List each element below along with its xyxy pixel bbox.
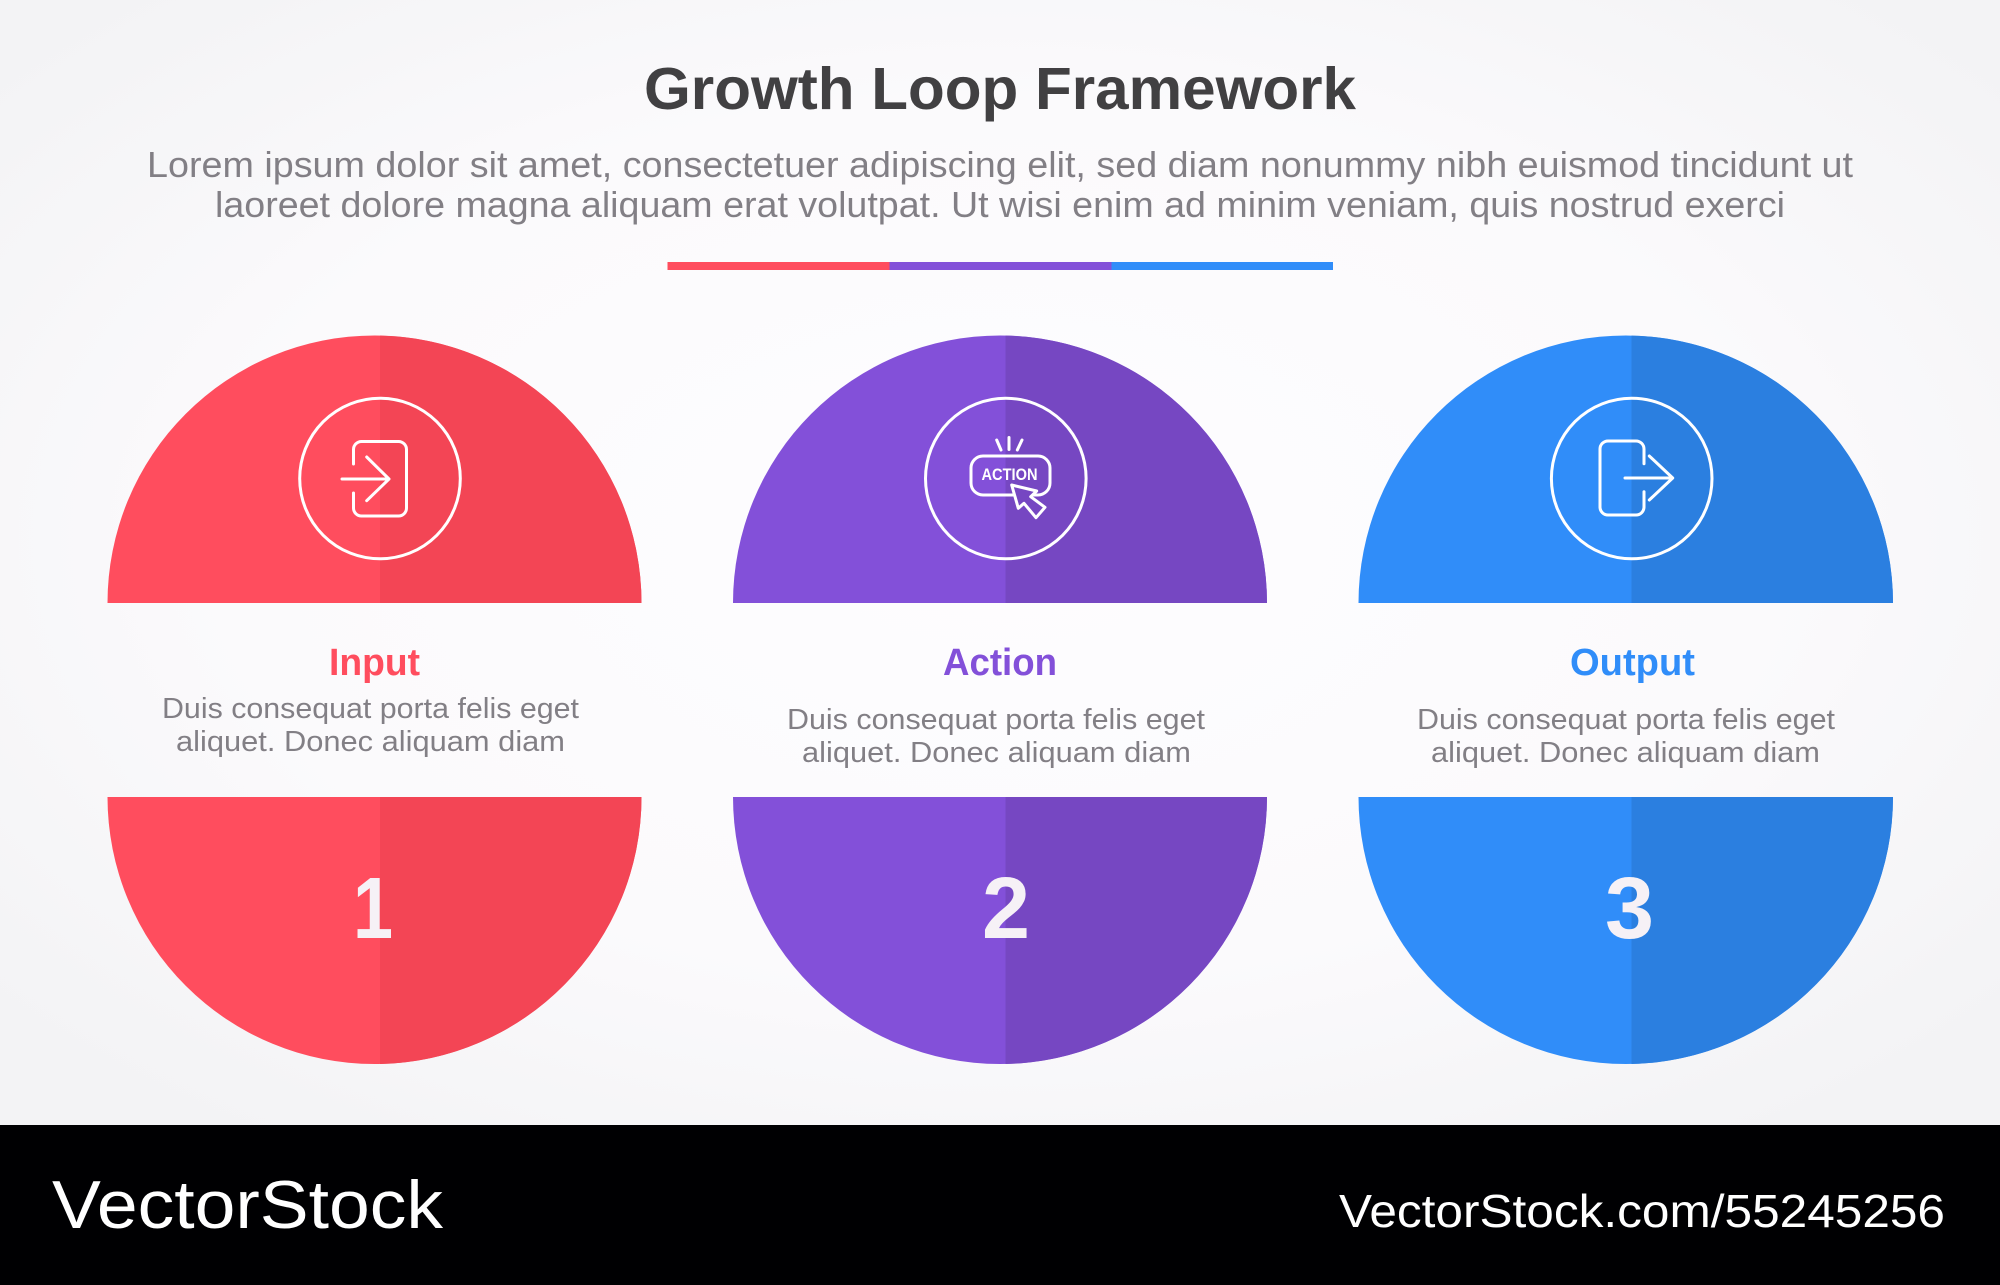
footer bar (0, 1125, 2000, 1285)
number 3: 3 (1605, 860, 1654, 957)
panel: action (733, 336, 1267, 1064)
action top semicircle (733, 336, 1267, 603)
input description: Duis consequat porta felis eget (162, 693, 579, 725)
output bottom semicircle (1358, 797, 1893, 1064)
output top semicircle (1358, 336, 1893, 603)
tricolor divider (668, 262, 1333, 270)
icon: action button with cursor in ring (926, 398, 1086, 559)
input bottom semicircle (108, 797, 642, 1064)
input label: Input (329, 642, 420, 684)
input top semicircle (108, 336, 642, 603)
subtitle text (147, 144, 1853, 225)
number 2: 2 (982, 860, 1030, 957)
action description (787, 704, 1205, 769)
action description: Duis consequat porta felis eget (787, 704, 1205, 736)
icon: exit door in ring (1551, 398, 1712, 559)
panel: input (108, 336, 642, 1064)
icon: enter door in ring (300, 398, 460, 559)
number 1: 1 (353, 860, 393, 957)
title: Growth Loop Framework (644, 56, 1356, 122)
footer url: VectorStock.com/55245256 (1339, 1185, 1945, 1237)
subtitle text: Lorem ipsum dolor sit amet, consectetuer adipiscing elit, sed diam nonummy nibh euismod tincidunt ut (147, 144, 1853, 185)
action bottom semicircle (733, 797, 1267, 1064)
panel: output (1358, 336, 1893, 1064)
output description: Duis consequat porta felis eget (1417, 704, 1835, 736)
input description: aliquet. Donec aliquam diam (176, 726, 565, 758)
output label: Output (1570, 642, 1695, 684)
output description (1417, 704, 1835, 769)
output description: aliquet. Donec aliquam diam (1431, 737, 1820, 769)
icon: action button with cursor in ring: ACTION (982, 465, 1038, 484)
input description (162, 693, 579, 758)
action description: aliquet. Donec aliquam diam (802, 737, 1191, 769)
footer logo text: VectorStock (52, 1167, 444, 1243)
subtitle text: laoreet dolore magna aliquam erat volutpat. Ut wisi enim ad minim veniam, quis nostrud exerci (215, 184, 1785, 225)
action label: Action (943, 642, 1057, 684)
